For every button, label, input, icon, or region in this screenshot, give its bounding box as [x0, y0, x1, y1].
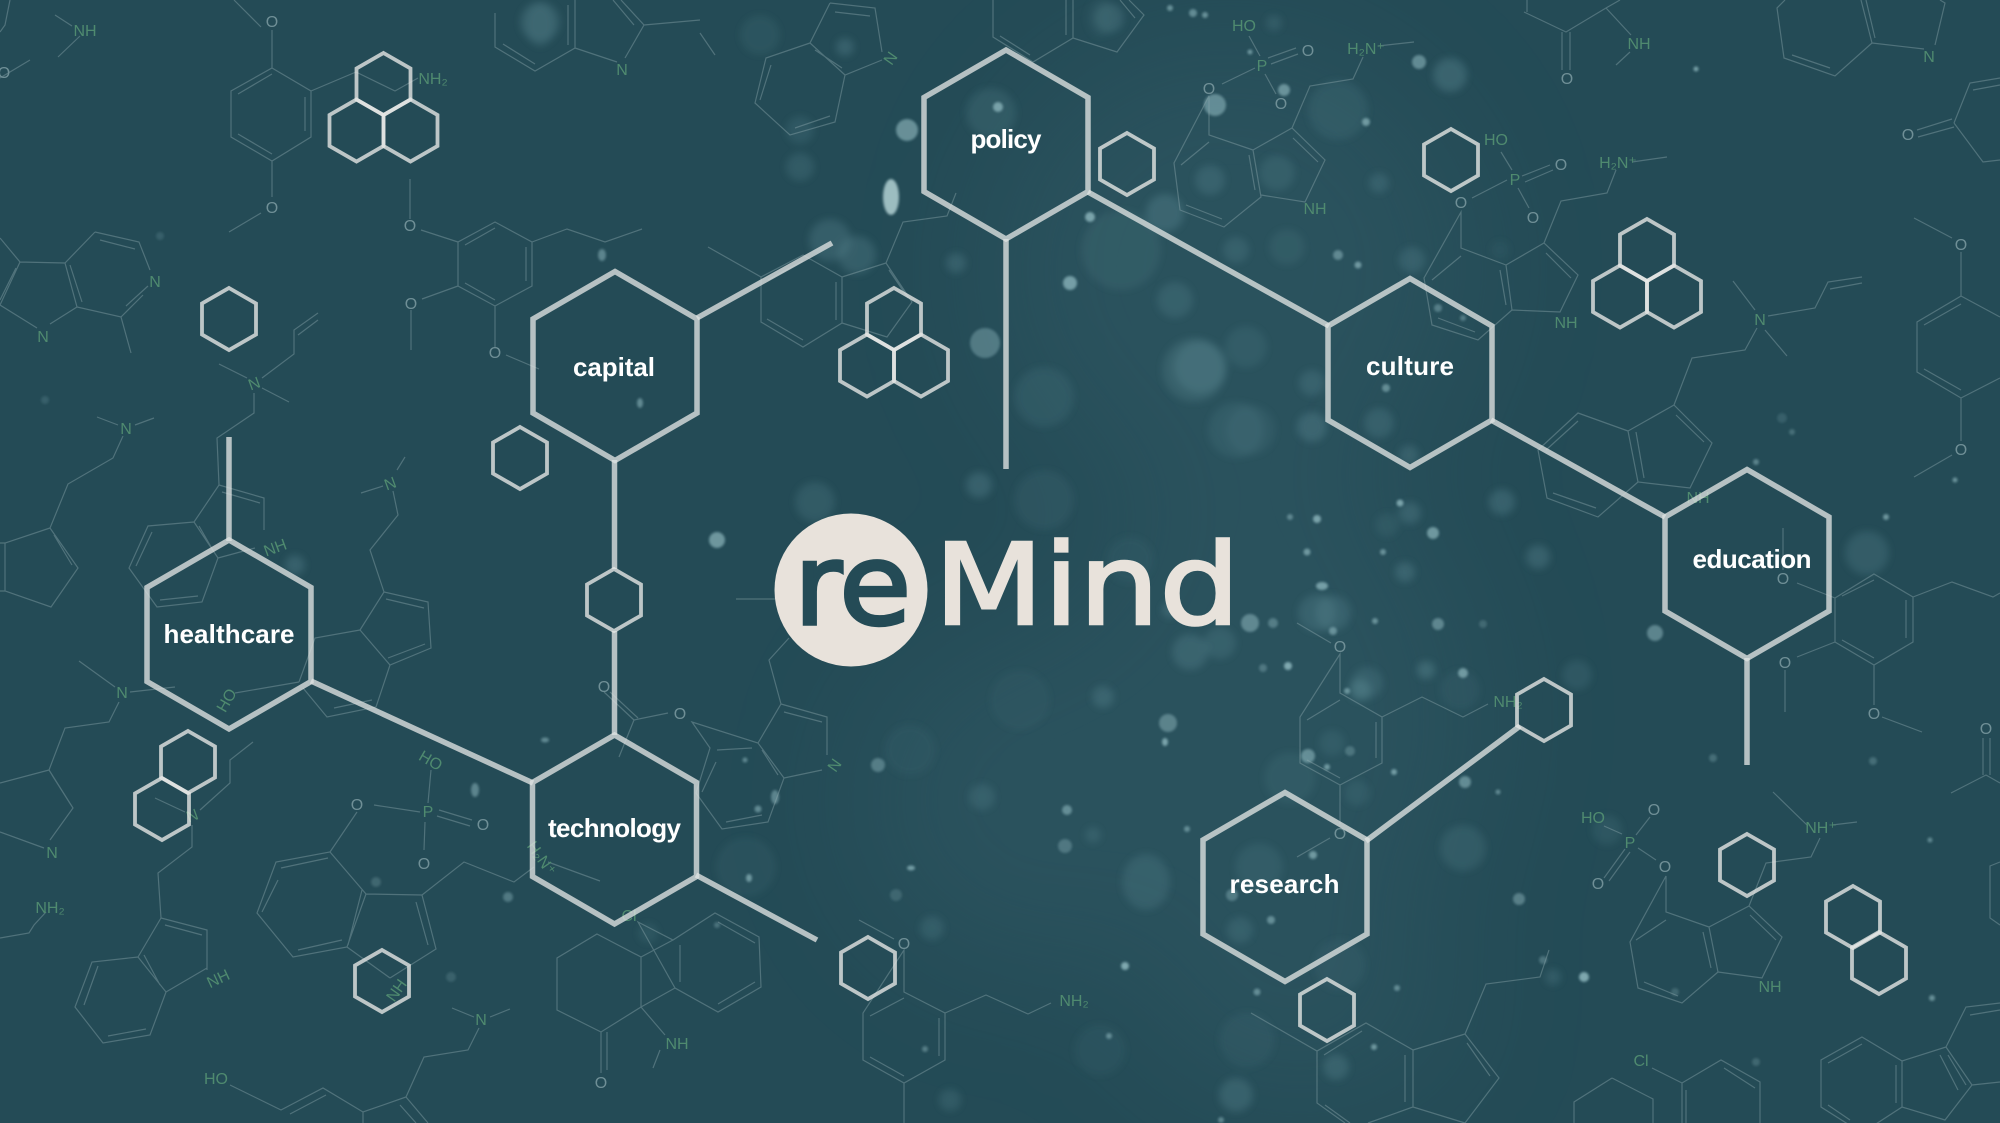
molecule: molecule right of technology: O	[674, 706, 686, 723]
molecule: lower-right phosphate indole: O	[1592, 876, 1604, 893]
panel: policy hexagon	[924, 50, 1088, 239]
molecule: culture phosphate indole: NH	[1554, 315, 1578, 332]
molecule: lower-left indole: NH	[205, 967, 233, 992]
molecule: left dimethylamine: N	[120, 421, 132, 438]
molecule: centre phosphate: O	[418, 856, 430, 873]
molecule: top phosphate indole: P	[1257, 58, 1267, 75]
molecule: left pyridine indole: N	[37, 329, 49, 346]
molecule: top phosphate indole: O	[1302, 43, 1314, 60]
molecule: lower-left amine: N	[46, 845, 58, 862]
molecule: allyl amine indole: N	[246, 374, 263, 394]
molecule: bottom dimethylamine	[204, 1008, 510, 1123]
molecule: centre phosphate: H₂N⁺	[523, 839, 559, 879]
small hexagons	[202, 129, 1774, 1041]
molecule: lower-right phosphate indole: O	[1659, 859, 1671, 876]
panel: capital hexagon	[533, 272, 697, 460]
connector lines	[229, 192, 1747, 940]
logo: reMind	[774, 514, 1240, 666]
label: culture: culture	[1366, 351, 1454, 381]
molecule: left dimethylamine	[0, 417, 154, 607]
molecule: right edge fragment	[1951, 721, 2000, 925]
molecule: bottom chloro ketamine	[557, 908, 761, 1092]
molecule: lower-left amine	[0, 661, 175, 862]
panel: culture hexagon	[1328, 278, 1492, 468]
panel: healthcare hexagon	[147, 540, 311, 729]
molecule: lower-right phosphate indole: NH	[1758, 979, 1782, 996]
molecule: lower-left amine: N	[116, 685, 128, 702]
molecule: top-left dimethoxy ring: O	[266, 200, 278, 217]
molecule: bottom dimethylamine: N	[475, 1012, 487, 1029]
molecule: top phosphate indole	[1174, 18, 1414, 227]
molecule: bottom dimethylamine: HO	[204, 1071, 228, 1088]
molecule: left pyridine indole	[0, 232, 161, 353]
label: education: education	[1692, 544, 1812, 574]
molecule: culture phosphate indole: O	[1455, 195, 1467, 212]
molecule: lower-left indole: N	[184, 806, 201, 826]
molecule: centre benzene amine	[1297, 623, 1523, 857]
molecule: molecule right of technology: O	[598, 679, 610, 696]
background glow	[860, 40, 1480, 1100]
molecule: right allyl amine indole: NH	[1686, 490, 1710, 507]
molecule: top-left dimethoxy ring: NH₂	[418, 71, 448, 88]
molecule: lower benzene amine: O	[898, 936, 910, 953]
molecule: centre-left amine: N	[382, 474, 399, 494]
molecule: top right amide	[1524, 0, 1651, 88]
molecule: bottom chloro ring: Cl	[1633, 1053, 1649, 1070]
molecule: culture phosphate indole: P	[1510, 172, 1520, 189]
molecule: right edge fragment: O	[1980, 721, 1992, 738]
molecule: bottom-right indole	[1821, 1003, 2000, 1123]
molecule: trimethoxy ring near education: O	[1779, 655, 1791, 672]
molecule: culture phosphate indole	[1424, 132, 1667, 340]
icon: triple hexagon cluster centre	[840, 288, 948, 396]
molecule: right edge carbonyl	[1902, 78, 2000, 162]
molecule: top indole: N	[616, 62, 628, 79]
molecule: right edge carbonyl: O	[1902, 127, 1914, 144]
molecule: centre phosphate: NH	[384, 977, 411, 1005]
molecule: right edge dimethoxy ring	[1914, 218, 2000, 477]
molecule: lower-right phosphate indole: HO	[1581, 810, 1605, 827]
label: capital: capital	[573, 352, 655, 382]
molecule: centre phosphate: O	[477, 817, 489, 834]
molecule: top phosphate indole: O	[1275, 96, 1287, 113]
molecule: centre benzene amine: O	[1334, 639, 1346, 656]
molecule: top-left dimethoxy ring	[229, 0, 448, 232]
molecule: right allyl amine indole: N	[1754, 312, 1766, 329]
panel: technology hexagon	[532, 735, 696, 924]
molecule: culture phosphate indole: H₂N⁺	[1599, 155, 1637, 172]
molecule: culture phosphate indole: O	[1527, 210, 1539, 227]
molecule: lower benzene amine: NH₂	[1059, 993, 1089, 1010]
molecule: allyl amine indole: NH	[262, 536, 289, 560]
molecule: right allyl amine indole	[1538, 277, 1862, 517]
molecule: top right indole	[1777, 0, 1945, 76]
molecule: left pyridine indole: N	[149, 274, 161, 291]
molecule: trimethoxy ring near education	[1777, 528, 2000, 732]
molecule: top centre indole	[993, 0, 1144, 62]
molecule: top-left dimethoxy ring: O	[266, 14, 278, 31]
molecule: top right indole: N	[1923, 49, 1935, 66]
molecule: culture phosphate indole: HO	[1484, 132, 1508, 149]
molecule: upper-centre indole: N	[881, 49, 902, 68]
molecule: molecule right of technology: N	[825, 756, 846, 775]
molecule: top right amide: O	[1561, 71, 1573, 88]
molecule: top right amide: NH	[1627, 36, 1651, 53]
molecule: lower benzene amine	[859, 920, 1089, 1123]
molecule: centre benzene amine: O	[1334, 826, 1346, 843]
molecule: culture phosphate indole: O	[1555, 157, 1567, 174]
bokeh particles: large soft	[285, 0, 1889, 1112]
molecule: top phosphate indole: HO	[1232, 18, 1256, 35]
label: healthcare: healthcare	[164, 619, 294, 649]
logo circle	[774, 514, 928, 666]
molecule: top-left corner amine	[0, 0, 97, 82]
icon: triple hexagon cluster right	[1593, 219, 1701, 328]
molecule: bottom chloro ketamine: O	[595, 1075, 607, 1092]
molecule: top phosphate indole: NH	[1303, 201, 1327, 218]
label: technology: technology	[548, 813, 682, 843]
panel: research hexagon	[1203, 792, 1367, 982]
molecule: centre indole near capital	[708, 193, 956, 347]
molecule: bottom chloro ketamine: NH	[665, 1036, 689, 1053]
molecule: top-left corner amine: NH	[73, 23, 97, 40]
molecule: trimethoxy ring: O	[405, 296, 417, 313]
label: policy: policy	[970, 124, 1042, 154]
molecule: trimethoxy ring near education: O	[1777, 571, 1789, 588]
molecule: lower-right phosphate indole	[1581, 792, 1857, 1003]
molecule: trimethoxy ring	[404, 179, 642, 369]
icon: double hexagon right	[1826, 886, 1906, 994]
icon: double hexagon left	[135, 731, 215, 840]
molecule: top phosphate indole: O	[1203, 81, 1215, 98]
panel: education hexagon	[1665, 470, 1829, 658]
molecule: lower-right phosphate indole: P	[1625, 835, 1635, 852]
molecule: lower-left indole: NH₂	[35, 900, 65, 917]
molecule: right edge dimethoxy ring: O	[1955, 442, 1967, 459]
molecule: centre phosphate: P	[423, 804, 433, 821]
molecule: top phosphate indole: H₂N⁺	[1347, 41, 1385, 58]
molecule: top indole	[495, 0, 700, 79]
molecule: lower centre indole	[1251, 950, 1549, 1123]
molecule: trimethoxy ring: O	[489, 345, 501, 362]
molecule: lower-right phosphate indole: NH⁺	[1805, 820, 1837, 837]
molecule: centre benzene amine: NH₂	[1493, 694, 1523, 711]
label: research: research	[1230, 869, 1340, 899]
molecule: centre-left amine: HO	[214, 686, 241, 715]
molecule: centre phosphate: O	[351, 797, 363, 814]
molecule: trimethoxy ring: O	[404, 218, 416, 235]
molecule: lower-left indole	[0, 742, 253, 1043]
molecule: trimethoxy ring near education: O	[1868, 706, 1880, 723]
molecule: molecule right of technology	[598, 599, 846, 829]
molecule: lower-right phosphate indole: O	[1648, 802, 1660, 819]
logo text: Mind: Mind	[934, 521, 1240, 651]
molecule: centre phosphate	[257, 748, 600, 1005]
molecule: bottom chloro ketamine: Cl	[621, 908, 637, 925]
molecule: centre-left amine	[214, 457, 431, 717]
molecule: upper-centre indole	[700, 3, 902, 135]
molecule: bottom chloro ring	[1574, 1053, 1760, 1123]
molecule: centre phosphate: HO	[416, 748, 445, 775]
molecule: right edge dimethoxy ring: O	[1955, 237, 1967, 254]
logo text: re: re	[794, 521, 911, 651]
icon: triple hexagon cluster top-left	[330, 53, 438, 162]
molecule: allyl amine indole	[129, 313, 318, 607]
